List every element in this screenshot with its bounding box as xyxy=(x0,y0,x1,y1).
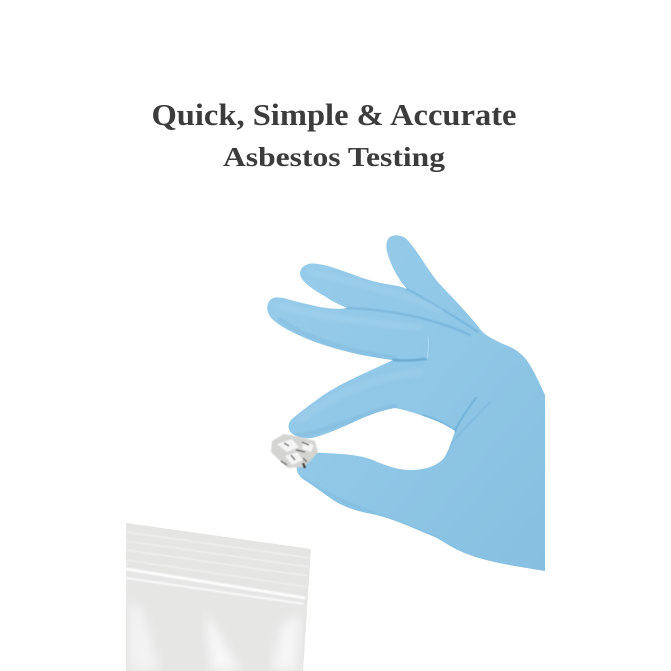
title xyxy=(152,97,516,172)
glove silhouette xyxy=(267,235,545,571)
asbestos sample xyxy=(271,434,318,468)
plastic zip bag xyxy=(126,523,311,671)
title line 1: Quick, Simple & Accurate xyxy=(152,97,516,132)
finger highlights xyxy=(426,304,442,358)
title line 2: Asbestos Testing xyxy=(223,142,446,172)
finger shading xyxy=(278,272,490,540)
blue gloved hand xyxy=(267,235,545,571)
